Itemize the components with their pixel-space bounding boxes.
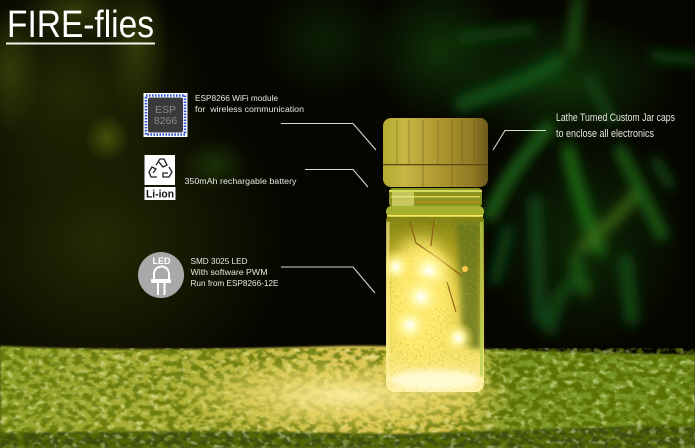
text: LED details: SMD 3025 LED xyxy=(190,256,248,266)
icon: Li-ion recycling: Li-ion xyxy=(146,188,174,200)
icon: LED: LED xyxy=(152,256,171,266)
text: jar caps xyxy=(556,112,675,140)
wooden cap xyxy=(383,118,488,187)
text: LED details: Run from ESP8266-12E xyxy=(190,278,279,288)
arrow: LED leader line xyxy=(281,267,375,293)
wire xyxy=(410,220,462,312)
icon: ESP8266 chip: ESP xyxy=(155,104,176,116)
jar body xyxy=(386,213,484,392)
text: ESP8266 module xyxy=(195,93,304,114)
arrow: battery leader line xyxy=(305,170,368,187)
text: LED details: With software PWM xyxy=(190,267,268,277)
icon: Li-ion recycling xyxy=(144,155,176,200)
arrow: jar cap leader line xyxy=(493,130,546,150)
text: ESP8266 module: for wireless communication xyxy=(195,104,304,114)
icon: ESP8266 chip xyxy=(144,93,188,137)
text: ESP8266 module: ESP8266 WiFi module xyxy=(195,93,278,103)
jar neck and thread xyxy=(386,188,484,217)
text: battery: 350mAh rechargable battery xyxy=(184,176,297,186)
LED glows xyxy=(386,247,474,352)
icon: LED xyxy=(138,252,184,298)
glass jar xyxy=(378,118,488,392)
arrow: ESP8266 leader line xyxy=(281,124,376,150)
text: LED details xyxy=(190,256,279,288)
stone ledge xyxy=(0,346,695,448)
title: FIRE-flies xyxy=(7,4,154,46)
icon: ESP8266 chip: 8266 xyxy=(154,115,177,127)
text: jar caps: to enclose all electronics xyxy=(556,128,654,140)
